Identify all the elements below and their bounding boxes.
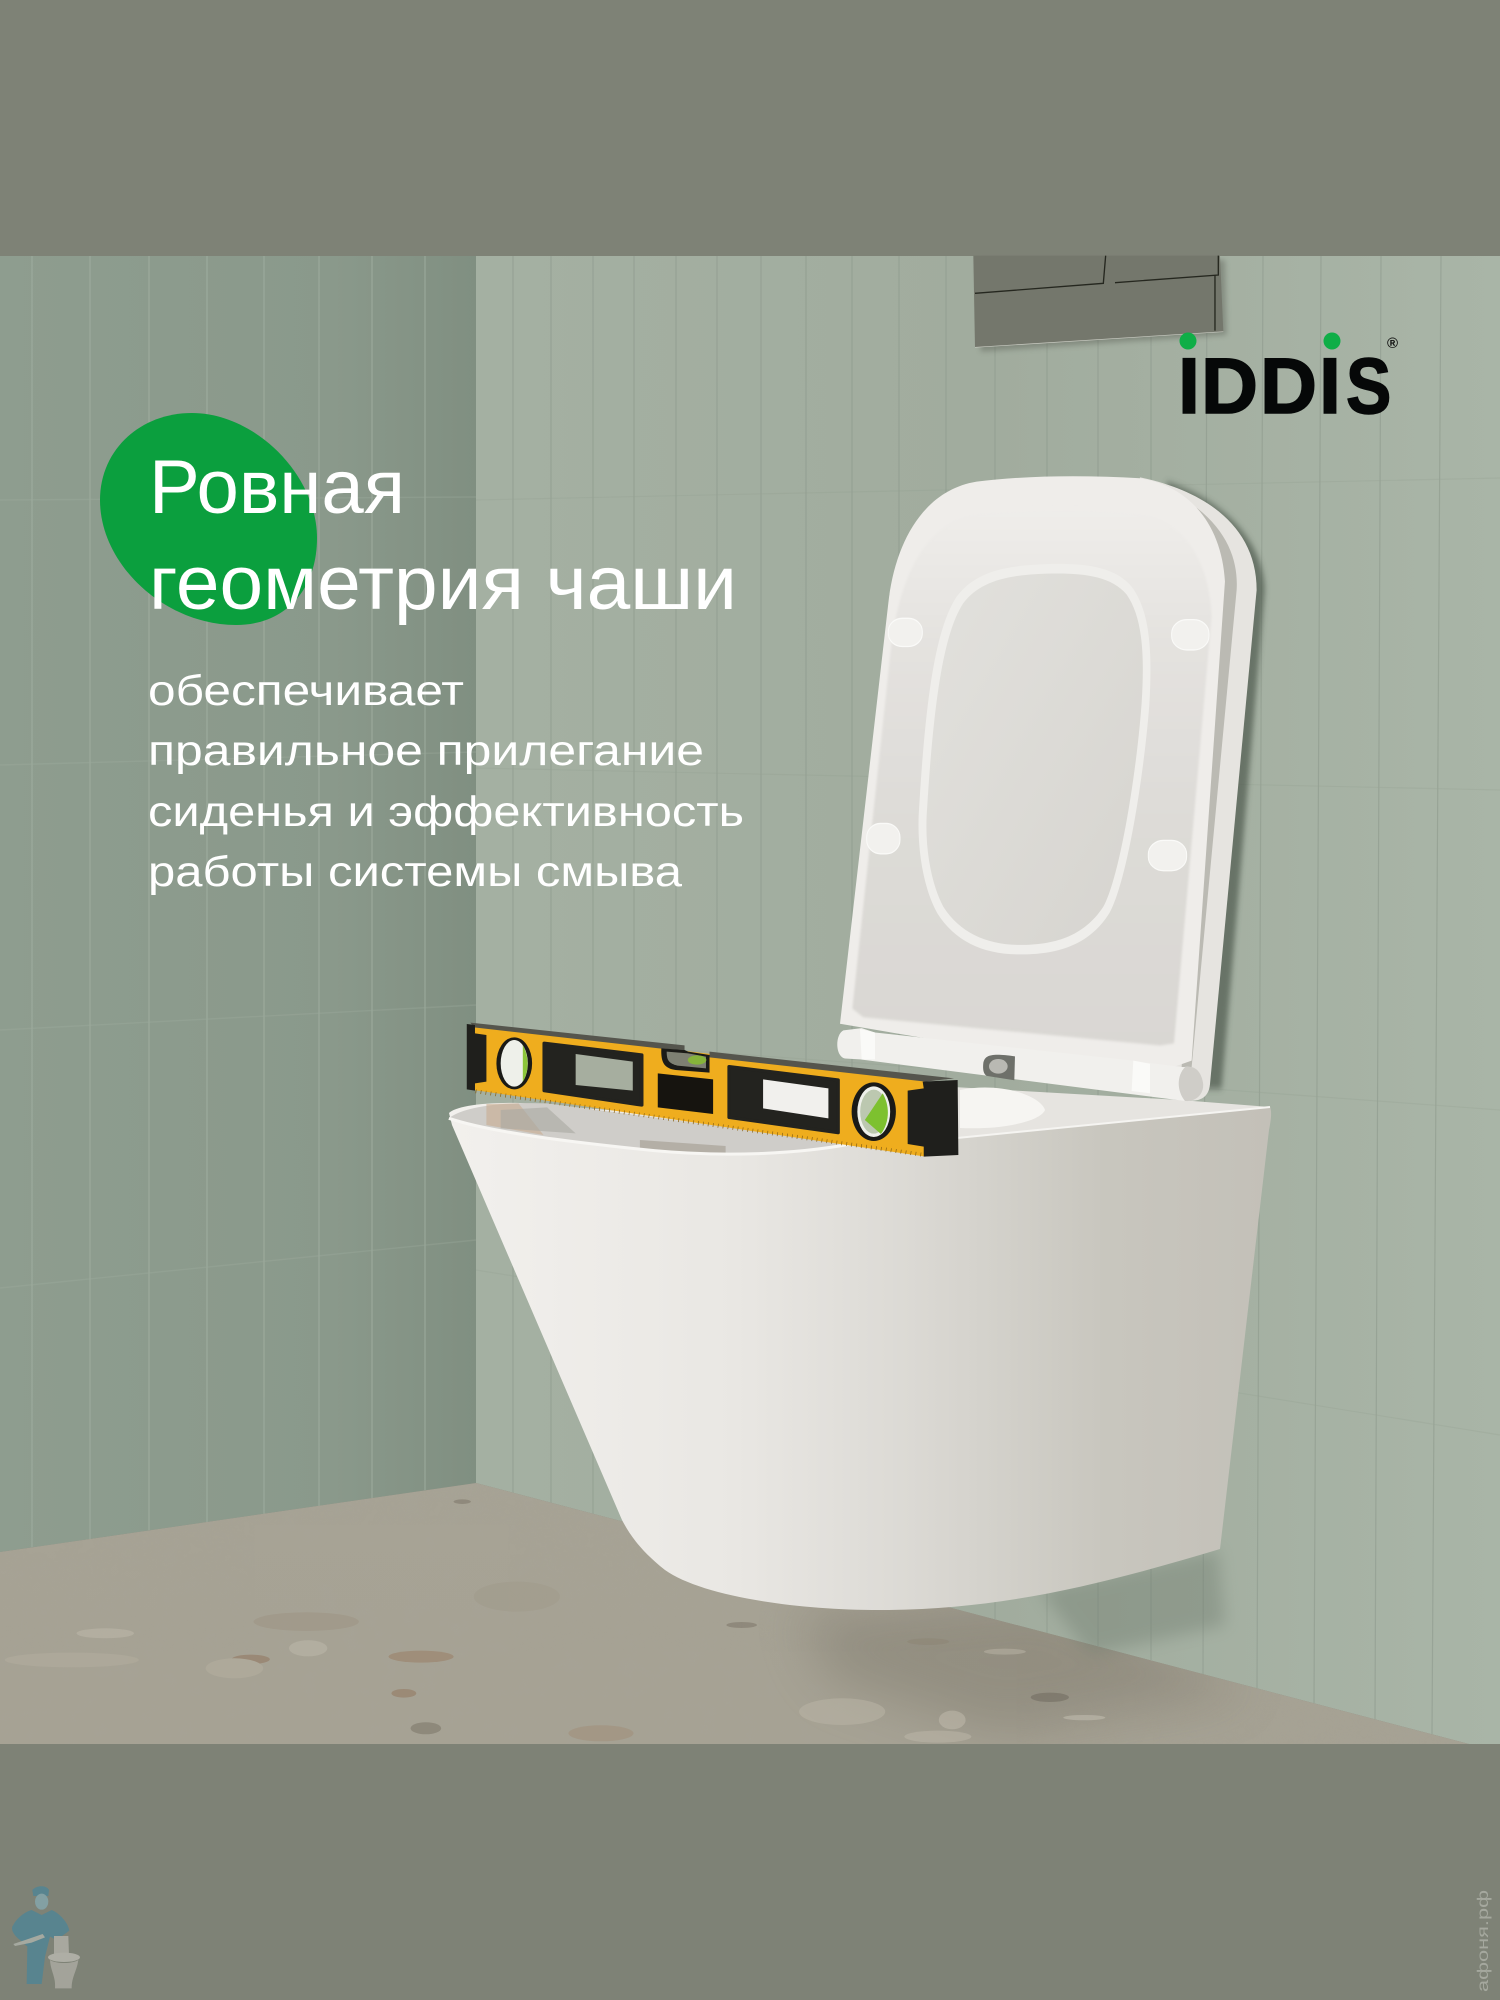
IDDIS logo: IDDI	[1178, 341, 1341, 430]
level window left	[544, 1043, 642, 1105]
top background band	[0, 0, 1500, 256]
floor stones	[5, 1499, 1105, 1743]
lid rim	[840, 476, 1225, 1076]
level body	[474, 1025, 926, 1157]
seat bumpers	[867, 618, 1209, 871]
bowl rim interior	[449, 1103, 851, 1154]
side watermark text: афоня.рф	[1475, 1890, 1492, 1992]
body text	[148, 667, 744, 896]
body text: работы системы смыва	[148, 848, 682, 896]
left tiled wall	[0, 256, 476, 1552]
hinge bar	[837, 1028, 1203, 1101]
lid inner panel	[852, 508, 1212, 1045]
level end cap left	[467, 1024, 486, 1091]
body text: правильное прилегание	[148, 727, 704, 775]
body text: сиденья и эффективность	[148, 788, 744, 836]
shadow of the bowl on the wall	[1040, 1550, 1225, 1655]
level centre block	[658, 1073, 713, 1114]
body text: обеспечивает	[148, 667, 464, 715]
level top strips	[470, 1023, 954, 1082]
IDDIS logo: ®	[1387, 335, 1398, 352]
bottom background band	[0, 1744, 1500, 2000]
level ruler ticks	[476, 1091, 922, 1155]
toilet bowl	[449, 1084, 1271, 1610]
level round vial right	[852, 1082, 896, 1141]
right tiled wall	[476, 256, 1500, 1744]
IDDIS logo	[1178, 332, 1398, 430]
level end cap right	[908, 1080, 958, 1157]
title: Ровная	[149, 445, 405, 530]
central recess	[918, 564, 1150, 954]
flush plate	[973, 256, 1227, 352]
icon: plumber with toilet watermark	[12, 1886, 80, 1988]
hinge chrome	[983, 1055, 1015, 1080]
level vial	[661, 1048, 710, 1073]
spirit level tool	[467, 1023, 958, 1157]
green blob accent	[100, 413, 317, 625]
level window right	[729, 1067, 838, 1133]
title: геометрия чаши	[149, 541, 737, 626]
toilet seat lid	[837, 476, 1265, 1101]
title	[149, 445, 737, 626]
level round vial left	[496, 1037, 532, 1089]
floor	[0, 1480, 1500, 1745]
IDDIS logo: S	[1346, 341, 1391, 430]
